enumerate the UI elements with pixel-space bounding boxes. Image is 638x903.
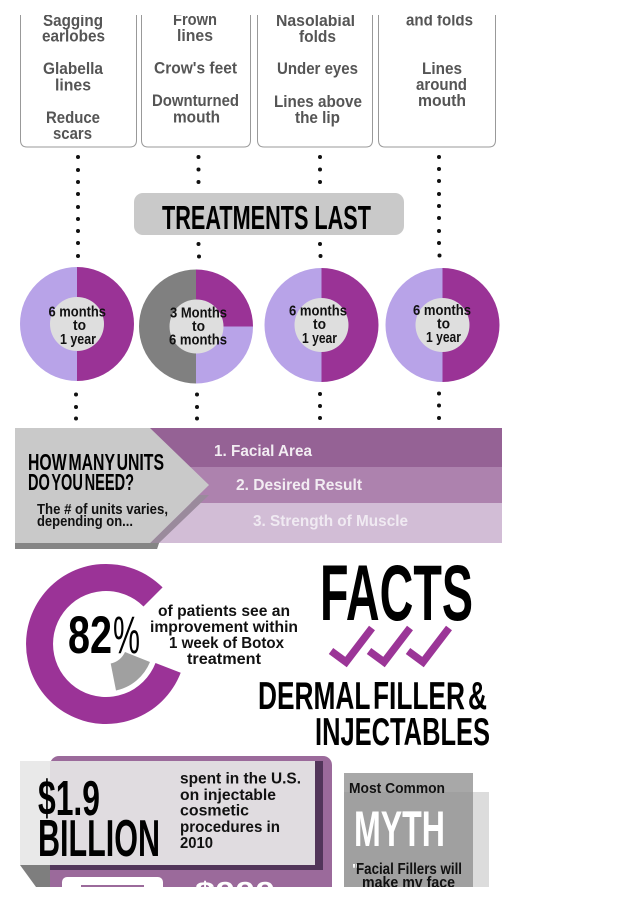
myth kicker: Most Common — [349, 781, 445, 797]
stat: $1.9 billion: $1.9 — [38, 772, 100, 826]
stat: 82% — [69, 616, 139, 654]
card 4: around — [416, 76, 467, 94]
card 2: Downturned — [152, 92, 239, 110]
heading: dermal filler and injectables: INJECTABLES — [315, 711, 490, 754]
panel: how many units — [15, 428, 502, 549]
spending text — [180, 771, 301, 852]
myth heading: MYTH — [354, 801, 445, 857]
donut chart 1: 6 months — [48, 304, 106, 320]
card 4 — [378, 10, 496, 147]
card 1: Reduce — [46, 109, 100, 127]
heading: treatments last: TREATMENTS LAST — [162, 200, 371, 237]
stat: $1.9 billion — [38, 778, 158, 856]
panel: 1.9 billion — [20, 756, 332, 887]
lower white box — [62, 877, 163, 887]
card 1 — [20, 10, 136, 147]
card 3: Under eyes — [277, 60, 358, 78]
card 1: Sagging — [43, 12, 103, 30]
donut chart 2: 3 Months — [170, 306, 227, 322]
chart: 82% ring — [26, 564, 181, 724]
ring wedge — [111, 652, 150, 690]
arrow subtext — [37, 502, 168, 530]
donut chart 4: 1 year — [426, 330, 461, 346]
text: botox improvement: of patients see an — [158, 603, 290, 620]
arrow subtext: depending on... — [37, 514, 133, 530]
donut chart 4 — [386, 268, 500, 382]
heading: dermal filler and injectables — [260, 682, 489, 746]
card 3: the lip — [295, 109, 340, 127]
spending text: procedures in — [180, 819, 280, 836]
band: desired result: 2. Desired Result — [236, 477, 363, 494]
text: botox improvement: treatment — [187, 651, 261, 668]
card 1: lines — [55, 76, 91, 94]
card 2: Crow's feet — [154, 60, 237, 78]
left fold — [20, 865, 50, 887]
arrow heading — [28, 454, 164, 490]
panel shadow — [50, 761, 323, 870]
spending text: 2010 — [180, 835, 213, 852]
text: botox improvement: 1 week of Botox — [169, 635, 284, 652]
stat: $1.9 billion: BILLION — [38, 810, 160, 868]
band: strength of muscle: 3. Strength of Muscle — [253, 513, 408, 530]
card 2: lines — [177, 27, 213, 45]
icon: three check marks — [331, 628, 449, 662]
band: desired result — [190, 467, 502, 503]
donut chart 2 — [139, 270, 253, 384]
spending text: on injectable — [180, 787, 276, 804]
donut chart 1: 1 year — [60, 332, 96, 348]
heading: facts: FACTS — [320, 548, 473, 637]
myth quote: make my face — [362, 874, 455, 892]
arrow heading: DO YOU NEED? — [28, 469, 134, 495]
donut chart 3: 6 months — [289, 304, 347, 320]
card 2: Frown — [173, 11, 217, 29]
donut chart 1: to — [73, 318, 86, 334]
panel: treatment areas cards — [20, 10, 496, 147]
spending text: spent in the U.S. — [180, 771, 301, 788]
card 1: earlobes — [42, 28, 105, 46]
text: botox improvement — [150, 603, 298, 668]
heading: treatments last — [134, 193, 404, 237]
purple backing — [50, 756, 332, 896]
band: facial area — [150, 428, 502, 467]
card 3: Nasolabial — [276, 12, 355, 30]
card 3 — [258, 10, 372, 147]
stat: 82%: % — [113, 606, 140, 665]
card 1: scars — [53, 125, 92, 143]
card 2: mouth — [173, 109, 220, 127]
donut chart 3: to — [313, 317, 326, 333]
card 1: Glabella — [43, 60, 104, 78]
donut chart 1 — [20, 267, 134, 381]
myth quote: Facial Fillers will — [356, 861, 462, 878]
donut chart 4: 6 months — [413, 303, 471, 319]
arrow shadow — [150, 495, 209, 549]
myth quote: " — [352, 861, 359, 878]
card 4: and folds — [406, 12, 473, 30]
dotted connectors — [74, 155, 442, 420]
donut chart 2: to — [192, 319, 205, 335]
donut chart 3: 1 year — [302, 331, 337, 347]
donut chart 4: to — [437, 316, 450, 332]
donut chart 3 — [264, 268, 378, 382]
band: facial area: 1. Facial Area — [214, 443, 312, 460]
panel: most common myth — [344, 773, 489, 893]
donut chart 2: 6 months — [169, 332, 227, 348]
card 4: Lines — [422, 60, 462, 78]
spending text: cosmetic — [180, 803, 249, 820]
card 4: mouth — [418, 92, 466, 110]
light card — [50, 761, 315, 865]
stat: 82%: 82 — [68, 606, 112, 665]
heading: dermal filler and injectables: DERMAL FILLER & — [258, 675, 487, 718]
myth quote — [353, 862, 461, 887]
card 2 — [142, 10, 250, 147]
arrow — [15, 428, 209, 543]
arrow heading: HOW MANY UNITS — [28, 449, 164, 475]
band: strength of muscle — [150, 503, 502, 543]
card 3: folds — [299, 28, 336, 46]
text: botox improvement: improvement within — [150, 619, 298, 636]
card 3: Lines above — [274, 93, 362, 111]
arrow subtext: The # of units varies, — [37, 502, 168, 518]
